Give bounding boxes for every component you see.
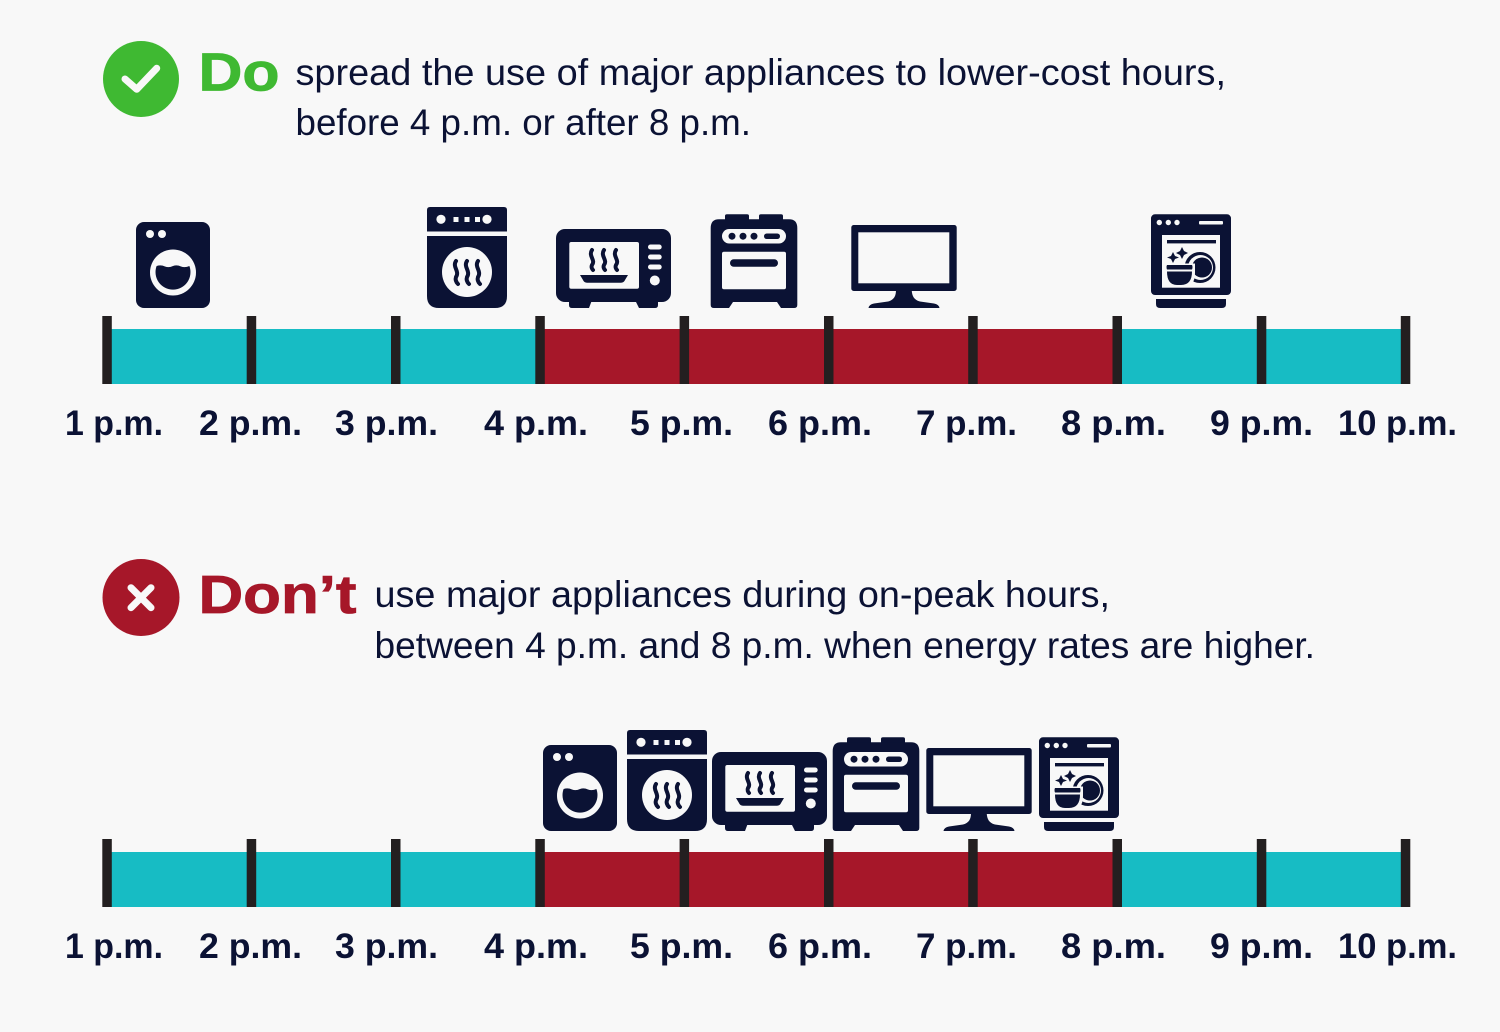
panel: don't section — [65, 559, 1457, 966]
time labels: 10 p.m. — [1338, 404, 1457, 443]
icon: green check badge — [103, 41, 179, 117]
icon: red x badge — [102, 559, 180, 636]
time labels: 2 p.m. — [199, 404, 302, 443]
panel: do section — [65, 41, 1457, 443]
time labels: 1 p.m. — [65, 404, 163, 443]
text: do advice — [296, 52, 1226, 143]
text: don't advice: use major appliances during on-peak hours, — [374, 574, 1110, 615]
time labels: 9 p.m. — [1210, 404, 1313, 443]
text: don't advice — [374, 574, 1315, 666]
time labels: 4 p.m. — [484, 404, 588, 443]
timeline: 1 p.m. to 10 p.m. with peak hours — [102, 839, 1410, 907]
icon: microwave — [556, 229, 671, 308]
icon: stove — [833, 737, 919, 831]
time labels: 8 p.m. — [1061, 404, 1166, 443]
time labels: 6 p.m. — [768, 404, 872, 443]
time labels: 7 p.m. — [916, 404, 1017, 443]
icon: television — [851, 225, 957, 308]
timeline: 1 p.m. to 10 p.m. with peak hours — [102, 316, 1410, 384]
icon: washing machine — [136, 222, 210, 308]
icon: dishwasher — [1039, 737, 1119, 831]
icon: stove — [711, 214, 797, 308]
time labels — [65, 927, 1457, 966]
icon: microwave — [712, 752, 827, 831]
text: do advice: spread the use of major appliances to lower-cost hours, — [296, 52, 1226, 93]
icon: clothes dryer — [627, 730, 707, 831]
icon: dishwasher — [1151, 214, 1231, 308]
icon: clothes dryer — [427, 207, 507, 308]
text: don't advice: between 4 p.m. and 8 p.m. when energy rates are higher. — [374, 625, 1315, 666]
time labels: 5 p.m. — [630, 404, 733, 443]
heading: Don't: Don’t — [198, 565, 357, 625]
icon: television — [926, 748, 1032, 831]
time labels: 3 p.m. — [335, 404, 438, 443]
text: do advice: before 4 p.m. or after 8 p.m. — [296, 102, 751, 143]
time labels — [65, 404, 1457, 443]
heading: Do: Do — [198, 42, 280, 102]
icon: washing machine — [543, 745, 617, 831]
